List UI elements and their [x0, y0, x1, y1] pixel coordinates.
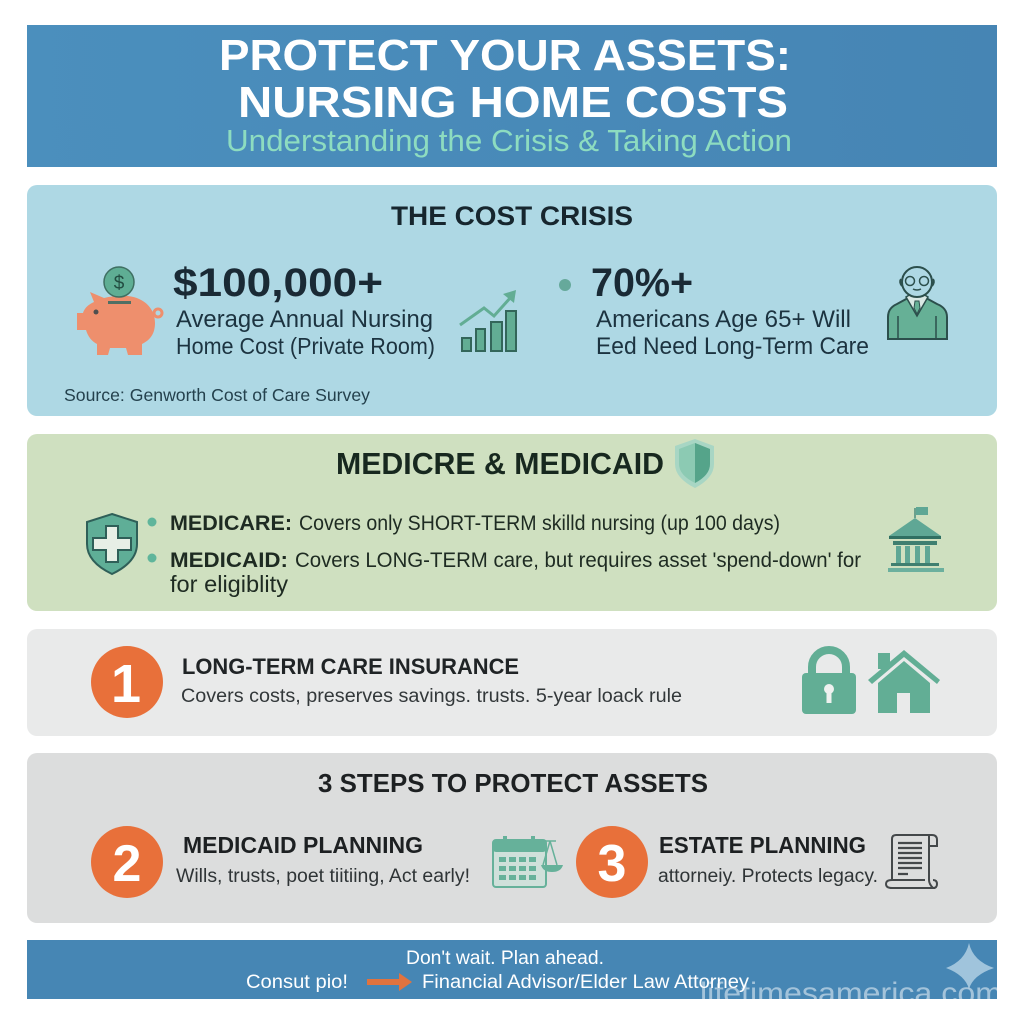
step 1 text: LONG-TERM CARE INSURANCE [182, 654, 519, 679]
footer text: Financial Advisor/Elder Law Attorney [422, 972, 750, 993]
stat: 70 percent: Eed Need Long-Term Care [596, 333, 869, 360]
text: medicaid: for eligiblity [170, 571, 289, 597]
text: medicaid: MEDICAID: [170, 549, 288, 572]
stat: 70 percent: 70%+ [591, 261, 693, 305]
footer text [246, 948, 750, 993]
panel: long-term care insurance [27, 629, 997, 736]
source note: Source: Genworth Cost of Care Survey [64, 385, 370, 405]
watermark: lifetimesamerica.com [700, 977, 1002, 1010]
stat: 100,000: $100,000+ [173, 261, 383, 305]
title [219, 31, 791, 127]
icon: older person [888, 267, 947, 339]
bullet [559, 279, 571, 291]
heading: 3 steps: 3 STEPS TO PROTECT ASSETS [318, 768, 708, 798]
icon: medical shield [87, 514, 137, 574]
bullet: medicare [148, 518, 156, 526]
icon: house [868, 650, 940, 713]
step 3 text: attorneiy. Protects legacy. [658, 866, 878, 887]
text: medicare: MEDICARE: [170, 512, 292, 535]
step 2 text: MEDICAID PLANNING [183, 832, 423, 858]
step badge 3 [576, 826, 648, 898]
step 3 text: ESTATE PLANNING [659, 832, 866, 858]
icon: sparkle [946, 943, 994, 989]
arrow [367, 973, 412, 991]
stat: 70 percent [591, 261, 869, 360]
icon: shield [675, 439, 714, 488]
step 2 text [176, 832, 470, 887]
step 1 text: Covers costs, preserves savings. trusts. 5-year loack rule [181, 686, 682, 707]
icon: padlock [802, 650, 856, 714]
panel: the cost crisis [27, 185, 997, 416]
bullet: medicaid [148, 554, 156, 562]
stat: 70 percent: Americans Age 65+ Will [596, 306, 851, 333]
heading: the cost crisis: THE COST CRISIS [391, 201, 633, 231]
panel: 3 steps to protect assets [27, 753, 997, 923]
step 1 text [181, 654, 682, 707]
step badge 2 [91, 826, 163, 898]
icon: document scroll [886, 835, 937, 888]
title: PROTECT YOUR ASSETS: [219, 31, 791, 80]
icon: rising bar chart [460, 290, 516, 351]
step badge 1 [91, 646, 163, 718]
step badge 3: 3 [598, 835, 626, 893]
panel: medicare and medicaid [27, 434, 997, 611]
subtitle: Understanding the Crisis & Taking Action [226, 123, 792, 158]
text: medicare: Covers only SHORT-TERM skilld nursing (up 100 days) [299, 512, 780, 535]
icon: piggy bank [77, 267, 162, 355]
heading: medicare and medicaid: MEDICRE & MEDICAID [336, 446, 664, 481]
icon: government building [888, 507, 944, 572]
stat: 100,000: Home Cost (Private Room) [176, 333, 435, 359]
stat: 100,000 [173, 261, 435, 359]
footer call to action [27, 940, 997, 999]
header banner [27, 25, 997, 167]
step badge 1: 1 [111, 654, 141, 714]
step 2 text: Wills, trusts, poet tiitiing, Act early! [176, 866, 470, 887]
footer text: Don't wait. Plan ahead. [406, 948, 604, 969]
footer text: Consut pio! [246, 972, 348, 993]
text: medicaid [170, 549, 861, 597]
icon: piggy bank: $ [114, 273, 125, 294]
step 3 text [658, 832, 878, 887]
step badge 2: 2 [113, 835, 141, 893]
text: medicaid: Covers LONG-TERM care, but requires asset 'spend-down' for [295, 549, 861, 572]
title: NURSING HOME COSTS [238, 78, 788, 127]
icon: calendar and scales [493, 836, 563, 887]
stat: 100,000: Average Annual Nursing [176, 306, 433, 333]
